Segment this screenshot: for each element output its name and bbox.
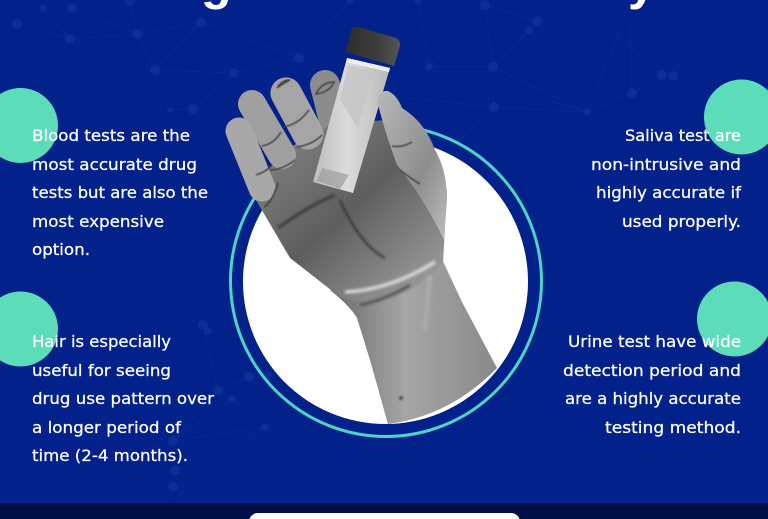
- text: urine test: [563, 332, 741, 437]
- text: hair tests: drug use pattern over: [32, 389, 215, 408]
- vial cap: [345, 27, 400, 66]
- text: saliva test: highly accurate if: [596, 183, 741, 202]
- text: hair tests: time (2-4 months).: [32, 446, 188, 465]
- text: saliva test: used properly.: [622, 212, 741, 231]
- icon: teal ring and white disc: [230, 126, 542, 436]
- text: urine test: testing method.: [605, 418, 741, 437]
- text: hair tests: a longer period of: [32, 418, 181, 437]
- text: urine test: Urine test have wide: [568, 332, 741, 351]
- text: blood tests: [32, 126, 208, 259]
- palm: [250, 120, 447, 302]
- text: saliva test: non-intrusive and: [591, 155, 741, 174]
- text: hair tests: [32, 332, 215, 465]
- text: blood tests: most expensive: [32, 212, 164, 231]
- thumb: [377, 91, 447, 240]
- footer white pill: [249, 513, 520, 519]
- ring finger: [252, 104, 282, 155]
- teal circle: saliva: [704, 80, 768, 154]
- text: blood tests: most accurate drug: [32, 155, 197, 174]
- text: saliva test: Saliva test are: [625, 126, 741, 145]
- footer band: [0, 503, 768, 519]
- text: saliva test: [591, 126, 741, 231]
- text: urine test: are a highly accurate: [565, 389, 741, 408]
- vial: [313, 27, 400, 193]
- middle finger: [286, 93, 308, 134]
- wrist: [330, 255, 497, 424]
- text: blood tests: option.: [32, 240, 90, 259]
- finger creases: [256, 80, 334, 207]
- text: hair tests: Hair is especially: [32, 332, 171, 351]
- teal circle: urine: [697, 282, 768, 356]
- text: blood tests: Blood tests are the: [32, 126, 190, 145]
- palm and wrist creases: [278, 195, 435, 400]
- title (cropped descenders): [201, 0, 656, 10]
- teal circle: hair: [0, 292, 58, 366]
- teal circle: blood: [0, 88, 58, 163]
- pinky finger: [239, 131, 262, 188]
- icon: hand holding sample vial: [239, 27, 497, 424]
- text: hair tests: useful for seeing: [32, 361, 171, 380]
- text: urine test: detection period and: [563, 361, 741, 380]
- text: blood tests: tests but are also the: [32, 183, 208, 202]
- index finger: [325, 85, 335, 125]
